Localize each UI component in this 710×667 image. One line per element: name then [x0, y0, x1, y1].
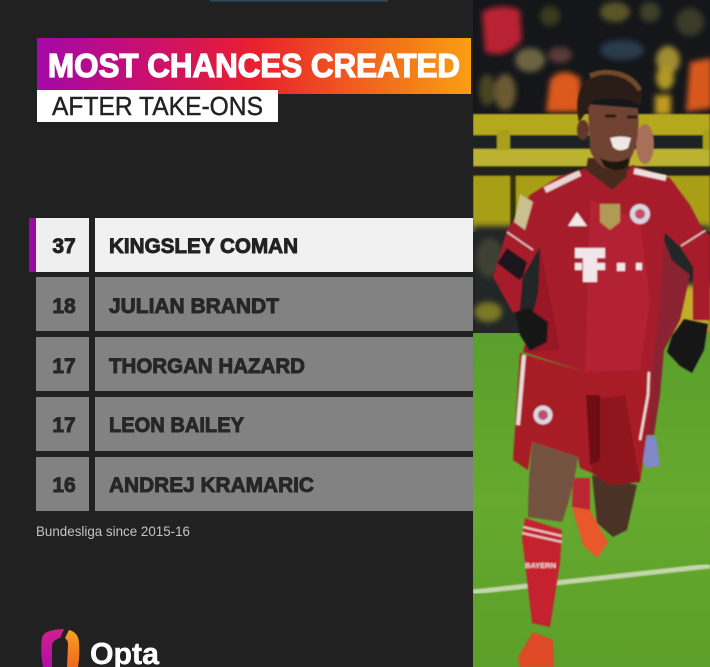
row 5: Andrej Kramaric: ANDREJ KRAMARIC — [109, 474, 314, 497]
row 2: Julian Brandt: JULIAN BRANDT — [109, 295, 279, 318]
row 4: Leon Bailey: 17 — [52, 414, 76, 437]
title banner: MOST CHANCES CREATED — [48, 47, 460, 84]
row 2: Julian Brandt — [36, 277, 473, 331]
pitch — [473, 333, 710, 667]
background player — [636, 124, 690, 468]
row 1: Kingsley Coman: KINGSLEY COMAN — [109, 235, 298, 258]
sponsor T logo — [575, 248, 642, 282]
row 4: Leon Bailey: LEON BAILEY — [109, 414, 244, 437]
shorts — [513, 353, 652, 485]
row 4: Leon Bailey — [36, 397, 473, 451]
title banner — [37, 38, 471, 94]
stadium crowd — [473, 0, 710, 115]
neck and head — [577, 70, 642, 190]
photo: celebrating footballer in red kit — [473, 0, 710, 667]
subtitle: AFTER TAKE-ONS — [52, 91, 263, 121]
row 2: Julian Brandt: 18 — [52, 295, 76, 318]
row 5: Andrej Kramaric — [36, 457, 473, 511]
row 3: Thorgan Hazard: 17 — [52, 355, 76, 378]
background panel — [0, 0, 473, 667]
row 3: Thorgan Hazard — [36, 337, 473, 391]
back leg and boot — [572, 475, 637, 558]
logo mark — [41, 629, 79, 667]
front thigh — [528, 442, 578, 522]
Opta logo — [41, 629, 160, 667]
torso jersey — [493, 165, 710, 372]
row 1: Kingsley Coman — [29, 218, 473, 272]
front boot — [518, 632, 554, 667]
front sock: BAYERN — [525, 561, 556, 570]
row 3: Thorgan Hazard: THORGAN HAZARD — [109, 355, 305, 378]
pitch line — [473, 566, 710, 592]
yellow barriers — [473, 114, 710, 232]
gloves — [515, 308, 708, 373]
footnote: Bundesliga since 2015-16 — [36, 523, 190, 539]
front sock — [522, 518, 562, 627]
lower stand — [473, 222, 710, 233]
ranking table — [29, 218, 473, 511]
top accent line — [210, 0, 388, 2]
badges — [568, 204, 650, 230]
player figure — [493, 70, 710, 667]
row 5: Andrej Kramaric: 16 — [52, 474, 76, 497]
row 1: Kingsley Coman: 37 — [52, 235, 76, 258]
